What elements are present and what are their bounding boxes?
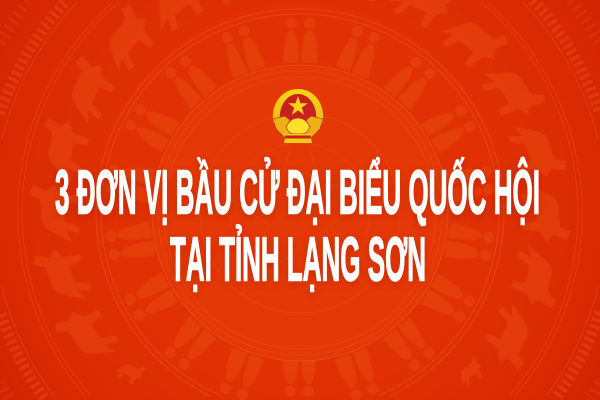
drum: inner figure band [104, 17, 496, 400]
emblem: right sheaf [300, 116, 323, 136]
title [55, 158, 540, 294]
emblem: star [288, 96, 308, 115]
emblem: left sheaf [273, 116, 296, 136]
emblem: gold ring [273, 89, 323, 134]
emblem: red field [280, 94, 316, 128]
emblem: cogwheel [285, 118, 311, 134]
title shadow [55, 161, 540, 297]
emblem: ribbon [283, 134, 313, 143]
icon: national emblem of Vietnam [273, 89, 323, 143]
drum: central disc [152, 65, 448, 361]
